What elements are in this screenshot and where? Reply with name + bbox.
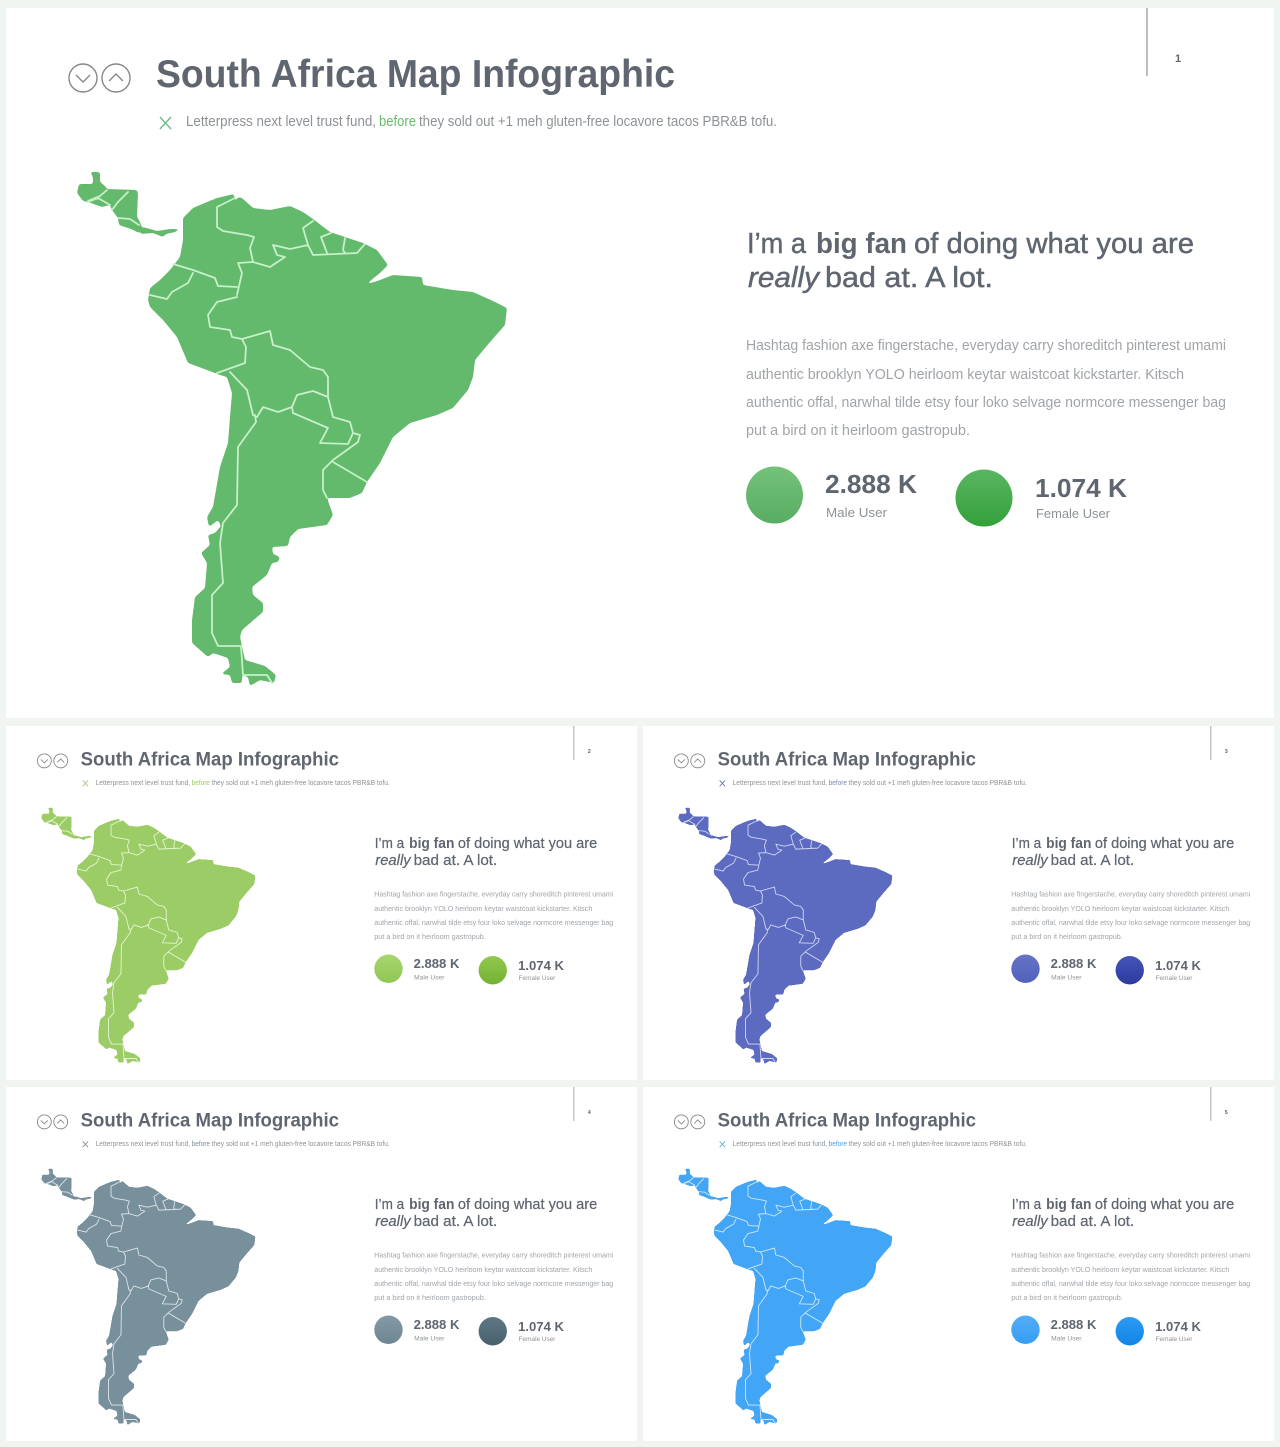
heading: bad at. A lot. (414, 1214, 497, 1230)
page number (574, 1087, 592, 1121)
page number: 4 (588, 1110, 592, 1116)
body text: authentic brooklyn YOLO heirloom keytar waistcoat kickstarter. Kitsch (1011, 904, 1229, 913)
heading (747, 228, 1194, 294)
stat: female users: Female User (519, 1336, 556, 1343)
page number: 2 (588, 749, 591, 755)
body text (746, 338, 1226, 439)
heading: of doing what you are (1095, 836, 1234, 852)
body text: authentic brooklyn YOLO heirloom keytar waistcoat kickstarter. Kitsch (374, 1265, 592, 1274)
stat: male users: Male User (414, 975, 445, 982)
stat: male users: 2.888 K (414, 956, 460, 971)
subtitle (160, 114, 777, 130)
subtitle: Letterpress next level trust fund, (96, 1139, 190, 1148)
map of South America (678, 808, 892, 1064)
stat: male users: 2.888 K (825, 469, 917, 499)
heading: really (375, 1214, 411, 1230)
subtitle: Letterpress next level trust fund, (733, 778, 827, 787)
heading: really (1012, 853, 1048, 869)
icon: previous and next arrows (674, 754, 705, 768)
page number (1147, 8, 1181, 76)
subtitle: Letterpress next level trust fund, (733, 1139, 827, 1148)
subtitle: they sold out +1 meh gluten-free locavore tacos PBR&B tofu. (849, 1139, 1027, 1148)
stat: male users (374, 1316, 460, 1344)
stat: male users: 2.888 K (414, 1317, 460, 1332)
page number: 5 (1225, 1110, 1228, 1116)
heading: really (375, 853, 411, 869)
title: South Africa Map Infographic (81, 1109, 339, 1131)
stat: female users: 1.074 K (1155, 1319, 1202, 1334)
body text: authentic offal, narwhal tilde etsy four loko selvage normcore messenger bag (374, 918, 613, 927)
stat: female users (1116, 1317, 1202, 1345)
panel: light green slide (6, 726, 637, 1080)
body text (1011, 889, 1251, 941)
body text: authentic offal, narwhal tilde etsy four loko selvage normcore messenger bag (1011, 918, 1250, 927)
heading: big fan (1046, 836, 1091, 852)
icon: previous and next arrows (674, 1115, 705, 1129)
heading: I’m a (747, 228, 807, 260)
subtitle: Letterpress next level trust fund, (96, 778, 190, 787)
stat: female users (956, 470, 1127, 526)
stat: male users: Male User (826, 505, 888, 520)
heading: of doing what you are (458, 1197, 597, 1213)
panel: main green slide (6, 8, 1274, 718)
body text: authentic brooklyn YOLO heirloom keytar waistcoat kickstarter. Kitsch (1011, 1265, 1229, 1274)
page number (1211, 726, 1228, 760)
stat: male users: Male User (414, 1336, 445, 1343)
subtitle (720, 778, 1027, 787)
heading: I’m a (375, 1197, 405, 1213)
stat: female users: Female User (519, 975, 556, 982)
stat: male users (746, 466, 917, 524)
subtitle (83, 1139, 390, 1148)
subtitle: they sold out +1 meh gluten-free locavore tacos PBR&B tofu. (212, 778, 390, 787)
stat: male users (374, 955, 460, 983)
subtitle (720, 1139, 1027, 1148)
stat: female users (1116, 956, 1202, 984)
heading: bad at. A lot. (825, 262, 993, 294)
heading (375, 1197, 597, 1230)
stat: female users: Female User (1036, 506, 1111, 521)
heading: bad at. A lot. (414, 853, 497, 869)
heading (375, 836, 597, 869)
panel: blue slide (643, 1087, 1274, 1441)
stat: female users: 1.074 K (1155, 958, 1202, 973)
icon: previous and next arrows (69, 64, 130, 92)
subtitle: they sold out +1 meh gluten-free locavore tacos PBR&B tofu. (849, 778, 1027, 787)
heading: I’m a (375, 836, 405, 852)
stat: female users: Female User (1156, 1336, 1193, 1343)
body text: authentic brooklyn YOLO heirloom keytar waistcoat kickstarter. Kitsch (374, 904, 592, 913)
subtitle: they sold out +1 meh gluten-free locavore tacos PBR&B tofu. (419, 114, 777, 130)
title: South Africa Map Infographic (156, 53, 675, 96)
stat: male users (1011, 955, 1097, 983)
body text: put a bird on it heirloom gastropub. (374, 1293, 486, 1302)
body text: authentic brooklyn YOLO heirloom keytar waistcoat kickstarter. Kitsch (746, 367, 1184, 383)
title: South Africa Map Infographic (718, 1109, 976, 1131)
body text: put a bird on it heirloom gastropub. (1011, 1293, 1123, 1302)
subtitle: before (829, 1139, 847, 1148)
subtitle: before (829, 778, 847, 787)
heading (1012, 1197, 1234, 1230)
body text (374, 1250, 614, 1302)
body text: authentic offal, narwhal tilde etsy four loko selvage normcore messenger bag (374, 1279, 613, 1288)
subtitle: Letterpress next level trust fund, (186, 114, 376, 130)
stat: male users: 2.888 K (1051, 1317, 1097, 1332)
heading: big fan (816, 228, 907, 260)
page number (574, 726, 591, 760)
icon: previous and next arrows (37, 754, 68, 768)
body text: put a bird on it heirloom gastropub. (374, 932, 486, 941)
body text: authentic offal, narwhal tilde etsy four loko selvage normcore messenger bag (1011, 1279, 1250, 1288)
heading: of doing what you are (1095, 1197, 1234, 1213)
body text: Hashtag fashion axe fingerstache, everyday carry shoreditch pinterest umami (1011, 1250, 1251, 1259)
body text (374, 889, 614, 941)
heading: of doing what you are (458, 836, 597, 852)
stat: male users: Male User (1051, 1336, 1082, 1343)
stat: female users: Female User (1156, 975, 1193, 982)
map of South America (41, 1169, 255, 1425)
panel: slate slide (6, 1087, 637, 1441)
stat: male users: 2.888 K (1051, 956, 1097, 971)
subtitle: before (379, 114, 416, 130)
map of South America (77, 172, 507, 686)
title: South Africa Map Infographic (81, 748, 339, 770)
heading: bad at. A lot. (1051, 1214, 1134, 1230)
stat: female users (479, 1317, 565, 1345)
page number (1211, 1087, 1228, 1121)
body text: put a bird on it heirloom gastropub. (1011, 932, 1123, 941)
body text: Hashtag fashion axe fingerstache, everyday carry shoreditch pinterest umami (374, 1250, 614, 1259)
body text: Hashtag fashion axe fingerstache, everyday carry shoreditch pinterest umami (746, 338, 1226, 354)
heading (1012, 836, 1234, 869)
heading: big fan (409, 1197, 454, 1213)
heading: I’m a (1012, 1197, 1042, 1213)
stat: male users (1011, 1316, 1097, 1344)
heading: big fan (409, 836, 454, 852)
heading: big fan (1046, 1197, 1091, 1213)
page number: 1 (1175, 53, 1181, 65)
map of South America (41, 808, 255, 1064)
heading: really (748, 262, 821, 294)
stat: male users: Male User (1051, 975, 1082, 982)
icon: previous and next arrows (37, 1115, 68, 1129)
body text: Hashtag fashion axe fingerstache, everyday carry shoreditch pinterest umami (374, 889, 614, 898)
body text: authentic offal, narwhal tilde etsy four loko selvage normcore messenger bag (746, 395, 1226, 411)
body text: Hashtag fashion axe fingerstache, everyday carry shoreditch pinterest umami (1011, 889, 1251, 898)
stat: female users: 1.074 K (1035, 473, 1127, 503)
stat: female users: 1.074 K (518, 958, 565, 973)
body text (1011, 1250, 1251, 1302)
heading: bad at. A lot. (1051, 853, 1134, 869)
title: South Africa Map Infographic (718, 748, 976, 770)
subtitle: before (192, 1139, 210, 1148)
body text: put a bird on it heirloom gastropub. (746, 423, 970, 439)
heading: really (1012, 1214, 1048, 1230)
subtitle: before (192, 778, 210, 787)
subtitle (83, 778, 390, 787)
heading: I’m a (1012, 836, 1042, 852)
subtitle: they sold out +1 meh gluten-free locavore tacos PBR&B tofu. (212, 1139, 390, 1148)
panel: indigo slide (643, 726, 1274, 1080)
stat: female users (479, 956, 565, 984)
stat: female users: 1.074 K (518, 1319, 565, 1334)
page number: 3 (1225, 749, 1228, 755)
map of South America (678, 1169, 892, 1425)
heading: of doing what you are (914, 228, 1194, 260)
